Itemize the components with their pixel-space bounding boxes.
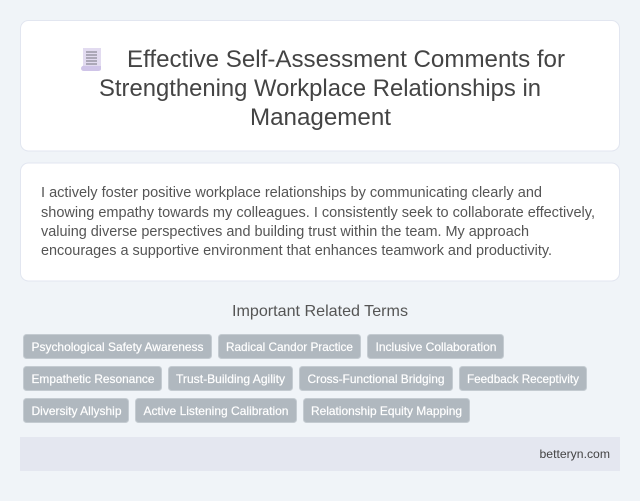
tags: related terms bbox=[24, 334, 586, 422]
tag bbox=[304, 398, 470, 422]
tag bbox=[24, 398, 128, 422]
tag bbox=[136, 398, 296, 422]
description text: encourages a supportive environment that enhances teamwork and productivity. bbox=[41, 243, 552, 259]
panel: title bbox=[20, 20, 620, 151]
panel: description bbox=[20, 163, 620, 281]
tag: Psychological Safety Awareness bbox=[32, 340, 204, 354]
tag: Inclusive Collaboration bbox=[376, 340, 496, 354]
tag bbox=[168, 366, 292, 390]
title text bbox=[99, 46, 565, 131]
title text: Effective Self-Assessment Comments for bbox=[127, 46, 565, 73]
tag: Cross-Functional Bridging bbox=[308, 372, 444, 386]
icon: document scroll bbox=[81, 48, 101, 71]
description text: valuing diverse perspectives and building trust within the team. My approach bbox=[41, 224, 529, 240]
description text: I actively foster positive workplace relationships by communicating clearly and bbox=[41, 185, 542, 201]
tag: Relationship Equity Mapping bbox=[311, 404, 462, 418]
tag bbox=[218, 334, 360, 358]
tag: Feedback Receptivity bbox=[467, 372, 579, 386]
tag bbox=[460, 366, 586, 390]
footer bbox=[20, 437, 620, 471]
tag: Radical Candor Practice bbox=[226, 340, 353, 354]
tag bbox=[368, 334, 504, 358]
title text: Management bbox=[250, 104, 391, 131]
title text: Strengthening Workplace Relationships in bbox=[99, 75, 541, 102]
footer: betteryn.com bbox=[540, 447, 610, 461]
description text: showing empathy towards my colleagues. I consistently seek to collaborate effectively, bbox=[41, 205, 595, 221]
heading: related terms: Important Related Terms bbox=[232, 303, 408, 320]
tag: Diversity Allyship bbox=[32, 404, 122, 418]
tag: Trust-Building Agility bbox=[176, 372, 285, 386]
description text bbox=[41, 185, 595, 259]
tag bbox=[24, 334, 212, 358]
tag: Empathetic Resonance bbox=[32, 372, 155, 386]
tag bbox=[300, 366, 452, 390]
tag: Active Listening Calibration bbox=[144, 404, 288, 418]
tag bbox=[24, 366, 162, 390]
